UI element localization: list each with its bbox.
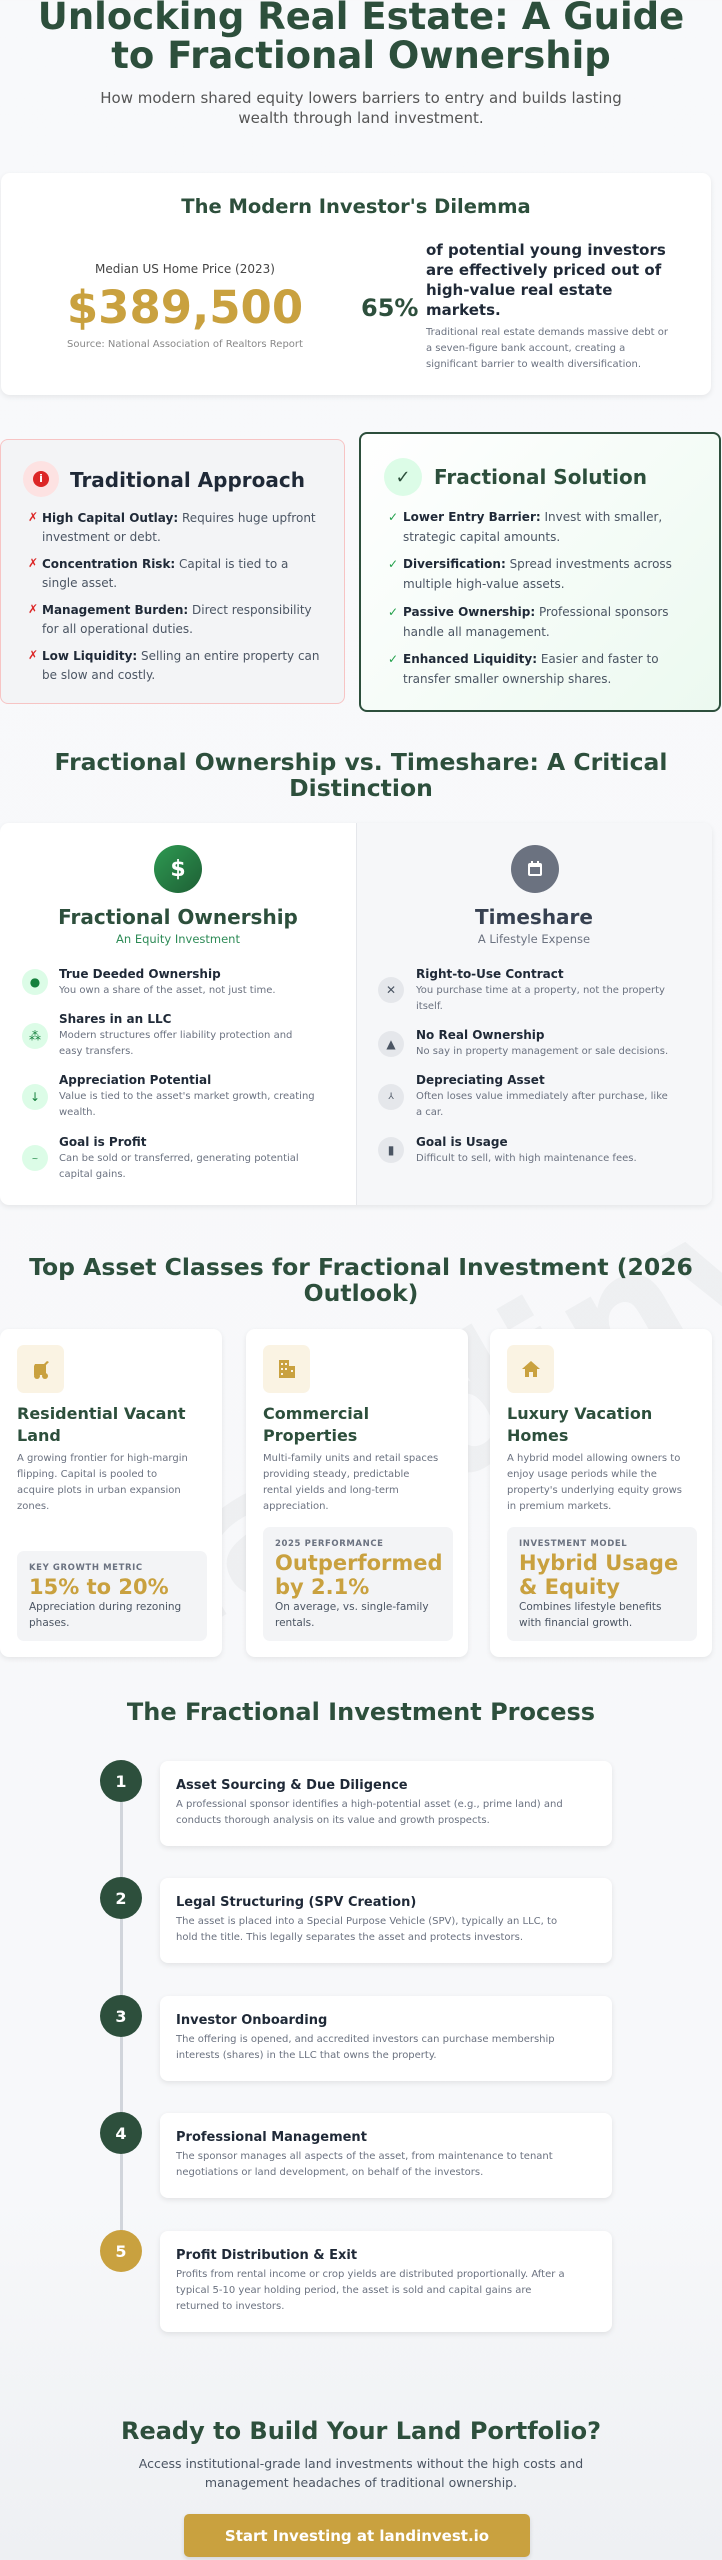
list: benefits: transfer smaller ownership shares. [403, 672, 611, 686]
card: commercial properties: Multi-family units and retail spaces [263, 1453, 438, 1464]
heading: process: The Fractional Investment Process [127, 1698, 595, 1726]
timeline: process steps: Profits from rental income or crop yields are distributed proportionally. After a [176, 2269, 565, 2280]
step 4: 4 [115, 2124, 127, 2142]
card: luxury vacation homes: Luxury Vacation [507, 1404, 652, 1423]
list: drawbacks: Concentration Risk: Capital is tied to a [42, 557, 288, 571]
step 1: 1 [115, 1772, 127, 1790]
subtitle: wealth through land investment. [238, 109, 484, 127]
column: timeshare: ⅄ [388, 1092, 394, 1102]
heading: traditional: Traditional Approach [70, 468, 305, 492]
stat: median price: $389,500 [67, 281, 303, 334]
timeline: process steps: hold the title. This legally separates the asset and protects investors. [176, 1932, 523, 1943]
list: drawbacks: ✗ [28, 556, 38, 570]
list: drawbacks: High Capital Outlay: Requires huge upfront [42, 511, 316, 525]
heading: asset classes: Outlook) [304, 1279, 418, 1307]
text: barrier note [426, 327, 668, 370]
card: luxury vacation homes: enjoy usage periods while the [507, 1469, 657, 1480]
list: benefits: Lower Entry Barrier: Invest with smaller, [403, 510, 662, 524]
column: fractional ownership: True Deeded Ownership [59, 967, 221, 981]
column: fractional ownership: ● [30, 975, 40, 989]
metric: growth: KEY GROWTH METRIC [29, 1563, 143, 1573]
column: timeshare: Right-to-Use Contract [416, 967, 564, 981]
column: timeshare: Timeshare [475, 905, 593, 929]
list: drawbacks: investment or debt. [42, 530, 161, 544]
CTA button: Start Investing at landinvest.io [225, 2526, 489, 2544]
column: timeshare: No say in property management or sale decisions. [416, 1046, 668, 1057]
column: fractional ownership: Shares in an LLC [59, 1012, 171, 1026]
timeline: process steps: interests (shares) in the LLC that owns the property. [176, 2050, 437, 2061]
panel: fractional solution [359, 432, 721, 712]
column: fractional ownership [22, 845, 315, 1180]
column: timeshare: Difficult to sell, with high maintenance fees. [416, 1153, 637, 1164]
column: fractional ownership: Value is tied to the asset's market growth, creating [59, 1091, 315, 1102]
timeline: process steps: Professional Management [176, 2130, 367, 2145]
timeline: process steps: A professional sponsor identifies a high-potential asset (e.g., prime land) and [176, 1799, 563, 1810]
step 5: 5 [115, 2242, 127, 2260]
stat: 65%: 65% [361, 294, 418, 322]
card: residential vacant land: acquire plots in urban expansion [17, 1485, 181, 1496]
text: barrier note: Traditional real estate demands massive debt or [426, 327, 668, 338]
CTA heading: Ready to Build Your Land Portfolio? [121, 2417, 601, 2445]
card: luxury vacation homes: property's underlying equity grows [507, 1485, 682, 1496]
card: commercial properties: Commercial [263, 1404, 369, 1423]
heading: vs timeshare: Distinction [289, 774, 433, 802]
column: fractional ownership: Goal is Profit [59, 1135, 147, 1149]
list: drawbacks: ✗ [28, 602, 38, 616]
text: priced out [426, 241, 666, 319]
list: drawbacks: single asset. [42, 576, 117, 590]
icon: dollar [154, 845, 202, 893]
CTA text: Access institutional-grade land investments without the high costs and [139, 2456, 583, 2471]
list: benefits: Diversification: Spread investments across [403, 557, 672, 571]
timeline: process steps: The asset is placed into a Special Purpose Vehicle (SPV), typically an LLC, to [176, 1916, 557, 1927]
list: drawbacks: Low Liquidity: Selling an entire property can [42, 649, 320, 663]
card: residential vacant land: A growing frontier for high-margin [17, 1453, 188, 1464]
card: commercial properties: rental yields and long-term [263, 1485, 399, 1496]
icon: alert: i [39, 472, 43, 485]
CTA text: management headaches of traditional ownership. [205, 2475, 517, 2490]
card: residential vacant land [0, 1329, 222, 1657]
list: benefits: handle all management. [403, 625, 550, 639]
column: fractional ownership: capital gains. [59, 1169, 126, 1180]
stat: median price: Source: National Association of Realtors Report [67, 339, 303, 350]
timeline: process steps: Investor Onboarding [176, 2013, 327, 2028]
metric: performance: rentals. [275, 1617, 314, 1629]
subtitle [100, 89, 622, 127]
list: drawbacks: ✗ [28, 648, 38, 662]
step 5 [100, 2230, 142, 2272]
title: to Fractional Ownership [111, 34, 611, 77]
timeline: process steps: conducts thorough analysis on its value and growth prospects. [176, 1815, 490, 1826]
card: commercial properties: providing steady, predictable [263, 1469, 409, 1480]
timeline: process steps: Profit Distribution & Exit [176, 2248, 357, 2263]
timeline: process steps: The sponsor manages all aspects of the asset, from maintenance to tenant [176, 2151, 553, 2162]
timeline: process steps: returned to investors. [176, 2301, 284, 2312]
card: luxury vacation homes: in premium markets. [507, 1501, 611, 1512]
heading: dilemma: The Modern Investor's Dilemma [181, 195, 531, 218]
list: benefits: multiple high-value assets. [403, 577, 565, 591]
card: luxury vacation homes: Homes [507, 1426, 568, 1445]
list: benefits [388, 510, 672, 686]
panel: traditional approach [0, 439, 345, 704]
metric: growth: phases. [29, 1617, 70, 1629]
column: fractional ownership: Modern structures offer liability protection and [59, 1030, 292, 1041]
timeline: process steps: Asset Sourcing & Due Diligence [176, 1778, 408, 1793]
panel: comparison [0, 823, 712, 1205]
metric: growth [17, 1551, 207, 1641]
column: timeshare: You purchase time at a property, not the property [416, 985, 665, 996]
heading: vs timeshare: Fractional Ownership vs. Timeshare: A Critical [55, 748, 667, 776]
text: priced out: are effectively priced out of [426, 261, 661, 279]
stat: median price [67, 262, 303, 350]
step 2: 2 [115, 1888, 127, 1908]
list: benefits: ✓ [388, 510, 398, 524]
column: timeshare: a car. [416, 1107, 443, 1118]
column: fractional ownership: ~ [32, 1154, 38, 1162]
icon: alert [23, 461, 59, 497]
metric: performance: by 2.1% [275, 1575, 369, 1599]
heading: vs timeshare [55, 748, 667, 802]
metric: model [507, 1527, 697, 1641]
list: drawbacks: ✗ [28, 510, 38, 524]
list: benefits: ✓ [388, 557, 398, 571]
column: fractional ownership: Can be sold or transferred, generating potential [59, 1153, 299, 1164]
step 1 [100, 1760, 142, 1802]
card: commercial properties: appreciation. [263, 1501, 329, 1512]
step 3 [100, 1995, 142, 2037]
icon: check: ✓ [395, 466, 411, 488]
panel: investor dilemma [1, 173, 711, 395]
metric: performance: On average, vs. single-family [275, 1601, 429, 1613]
card: commercial properties [246, 1329, 468, 1657]
title [38, 0, 684, 77]
timeline: process steps: typical 5-10 year holding period, the asset is sold and capital gains are [176, 2285, 531, 2296]
list: drawbacks: be slow and costly. [42, 668, 155, 682]
column: timeshare: ▮ [388, 1143, 394, 1157]
column: timeshare: ▲ [386, 1037, 396, 1051]
timeline: process steps [100, 1760, 613, 2335]
column: fractional ownership: ↓ [30, 1090, 40, 1104]
CTA text [138, 2456, 583, 2490]
column: timeshare: itself. [416, 1001, 443, 1012]
column: timeshare [378, 845, 668, 1164]
metric: model: INVESTMENT MODEL [519, 1539, 627, 1549]
metric: growth: 15% to 20% [29, 1575, 169, 1599]
icon: tractor [17, 1345, 64, 1393]
list: benefits: Passive Ownership: Professional sponsors [403, 605, 669, 619]
step 4 [100, 2112, 142, 2154]
list: benefits: strategic capital amounts. [403, 530, 560, 544]
CTA button [184, 2514, 530, 2557]
column: fractional ownership: An Equity Investment [116, 932, 240, 946]
text: priced out: high-value real estate [426, 281, 612, 299]
card: luxury vacation homes [490, 1329, 712, 1657]
text: barrier note: significant barrier to wealth diversification. [426, 359, 641, 370]
metric: growth: Appreciation during rezoning [29, 1601, 181, 1613]
list: drawbacks [28, 510, 320, 682]
timeline: process steps: Legal Structuring (SPV Creation) [176, 1895, 416, 1910]
icon: building [263, 1345, 310, 1393]
metric: performance [263, 1527, 453, 1641]
column: fractional ownership: ⁂ [29, 1029, 41, 1043]
column: timeshare: Often loses value immediately after purchase, like [416, 1091, 668, 1102]
list: drawbacks: Management Burden: Direct responsibility [42, 603, 312, 617]
metric: model: & Equity [519, 1575, 620, 1599]
timeline: process steps: The offering is opened, and accredited investors can purchase membership [176, 2034, 555, 2045]
step 2 [100, 1877, 142, 1919]
heading: asset classes: Top Asset Classes for Fractional Investment (2026 [29, 1253, 693, 1281]
heading: fractional: Fractional Solution [434, 465, 647, 489]
list: benefits: Enhanced Liquidity: Easier and faster to [403, 652, 659, 666]
column: timeshare: Goal is Usage [416, 1135, 508, 1149]
timeline: process steps: negotiations or land development, on behalf of the investors. [176, 2167, 483, 2178]
list: drawbacks: for all operational duties. [42, 622, 193, 636]
column: fractional ownership: You own a share of the asset, not just time. [59, 985, 276, 996]
list: benefits: ✓ [388, 652, 398, 666]
column: timeshare: A Lifestyle Expense [478, 932, 590, 946]
card: residential vacant land: Land [17, 1426, 61, 1445]
heading: asset classes [29, 1253, 693, 1307]
icon: house [507, 1345, 554, 1393]
icon: calendar [511, 845, 559, 893]
card: luxury vacation homes: A hybrid model allowing owners to [507, 1453, 680, 1464]
icon: check [384, 458, 422, 496]
card: residential vacant land: flipping. Capital is pooled to [17, 1469, 157, 1480]
step 3: 3 [115, 2006, 127, 2026]
card: residential vacant land: zones. [17, 1501, 49, 1512]
icon: dollar: $ [170, 856, 186, 882]
column: fractional ownership: Fractional Ownership [58, 905, 298, 929]
column: timeshare: Depreciating Asset [416, 1073, 545, 1087]
metric: model: Combines lifestyle benefits [519, 1601, 661, 1613]
column: timeshare: ✕ [386, 983, 396, 997]
metric: model: Hybrid Usage [519, 1551, 678, 1575]
column: fractional ownership: easy transfers. [59, 1046, 133, 1057]
card: residential vacant land: Residential Vacant [17, 1404, 185, 1423]
text: priced out: of potential young investors [426, 241, 666, 259]
metric: performance: Outperformed [275, 1551, 443, 1575]
text: barrier note: a seven-figure bank account, creating a [426, 343, 625, 354]
list: benefits: ✓ [388, 605, 398, 619]
metric: performance: 2025 PERFORMANCE [275, 1539, 384, 1549]
card: commercial properties: Properties [263, 1426, 357, 1445]
metric: model: with financial growth. [519, 1617, 632, 1629]
column: timeshare: No Real Ownership [416, 1028, 545, 1042]
column: fractional ownership: Appreciation Potential [59, 1073, 211, 1087]
text: priced out: markets. [426, 301, 501, 319]
subtitle: How modern shared equity lowers barriers to entry and builds lasting [100, 89, 622, 107]
stat: median price: Median US Home Price (2023) [95, 262, 275, 276]
column: fractional ownership: wealth. [59, 1107, 96, 1118]
